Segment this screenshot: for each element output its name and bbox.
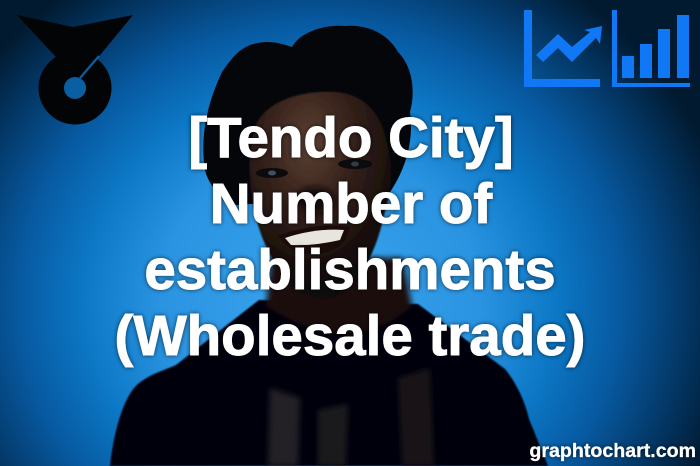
title	[115, 106, 585, 367]
eyes	[256, 159, 372, 178]
face	[250, 92, 391, 298]
icon: line chart with arrow	[524, 10, 602, 87]
nose shadow	[295, 187, 335, 213]
hair	[203, 26, 413, 205]
shoulders and dark blouse	[110, 300, 548, 466]
photo: smiling woman	[110, 26, 548, 466]
title: Number of	[210, 172, 492, 235]
title: [Tendo City]	[188, 106, 514, 169]
icon: city emblem	[17, 15, 133, 124]
icon: bar chart	[612, 10, 690, 87]
title: establishments	[144, 238, 556, 301]
blouse highlights	[268, 368, 434, 466]
mouth and teeth	[278, 226, 350, 254]
title: (Wholesale trade)	[115, 304, 585, 367]
neck	[266, 258, 412, 333]
watermark: site name: graphtochart.com	[529, 440, 696, 462]
